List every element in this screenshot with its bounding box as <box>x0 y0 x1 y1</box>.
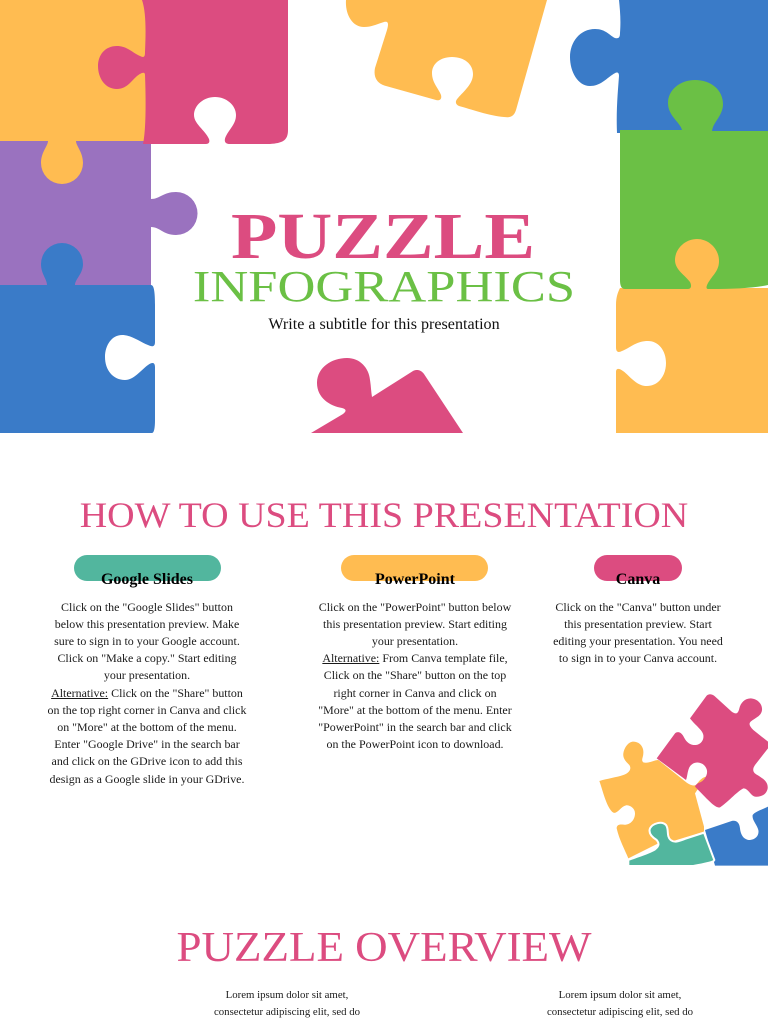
text: overview right: Lorem ipsum dolor sit amet, <box>559 989 681 1001</box>
text: Google Slides instructions <box>48 600 246 786</box>
text: PowerPoint instructions: Click on the "Share" button on the top <box>324 668 506 682</box>
text: PowerPoint instructions: right corner in Canva and click on <box>333 686 497 700</box>
button: PowerPoint <box>341 555 488 581</box>
piece: yellow top centre <box>346 0 547 117</box>
text: PowerPoint instructions <box>318 600 512 751</box>
piece: pink top left <box>98 0 288 144</box>
text: PowerPoint instructions: "More" at the bottom of the menu. Enter <box>318 703 512 717</box>
text: overview left: Lorem ipsum dolor sit amet, <box>226 989 348 1001</box>
text: Google Slides instructions: design as a Google slide in your GDrive. <box>50 772 244 786</box>
piece: cluster pink <box>657 694 768 807</box>
piece: cluster blue <box>705 807 768 866</box>
text: Google Slides instructions: Click on "Make a copy." Start editing <box>57 651 237 665</box>
heading: puzzle overview: PUZZLE OVERVIEW <box>176 923 592 971</box>
piece: green right <box>620 80 768 289</box>
text: Google Slides instructions: and click on the GDrive icon to add this <box>52 754 242 768</box>
label: Google Slides: Google Slides <box>101 571 193 588</box>
heading: how to use: HOW TO USE THIS PRESENTATION <box>80 496 688 536</box>
text: Google Slides instructions: below this presentation preview. Make <box>55 617 239 631</box>
text: PowerPoint instructions: your presentation. <box>372 634 458 648</box>
text: PowerPoint instructions: Alternative: From Canva template file, <box>322 651 508 665</box>
text: Google Slides instructions: sure to sign in to your Google account. <box>54 634 240 648</box>
text: Canva instructions: editing your presentation. You need <box>553 634 723 648</box>
icon: puzzle pieces cluster <box>599 694 768 866</box>
text: Google Slides instructions: Click on the "Google Slides" button <box>61 600 233 614</box>
title: INFOGRAPHICS: INFOGRAPHICS <box>193 263 575 311</box>
tab: yellow into green <box>670 235 724 295</box>
text: overview left <box>214 989 360 1024</box>
piece: blue bottom left <box>0 243 155 433</box>
text: overview right <box>547 989 693 1024</box>
text: Google Slides instructions: on "More" at the bottom of the menu. <box>57 720 237 734</box>
text: Google Slides instructions: Enter "Google Drive" in the search bar <box>54 737 240 751</box>
text: PowerPoint instructions: "PowerPoint" in the search bar and click <box>318 720 512 734</box>
text: PowerPoint instructions: on the PowerPoint icon to download. <box>326 737 504 751</box>
text: Canva instructions <box>553 600 723 665</box>
piece: cluster yellow <box>599 742 706 858</box>
text: Canva instructions: to sign in to your Canva account. <box>559 651 717 665</box>
text: Canva instructions: this presentation preview. Start <box>564 617 712 631</box>
text: Google Slides instructions: on the top right corner in Canva and click <box>48 703 246 717</box>
text: PowerPoint instructions: this presentation preview. Start editing <box>323 617 507 631</box>
text: overview right: consectetur adipiscing elit, sed do <box>547 1006 693 1018</box>
label: Canva: Canva <box>616 571 660 588</box>
text: Google Slides instructions: your presentation. <box>104 668 190 682</box>
piece: yellow right <box>616 288 768 433</box>
piece: cluster teal <box>628 823 714 866</box>
piece: blue top right <box>570 0 768 133</box>
text: PowerPoint instructions: Click on the "PowerPoint" button below <box>319 600 511 614</box>
text: overview left: consectetur adipiscing elit, sed do <box>214 1006 360 1018</box>
subtitle: Write a subtitle for this presentation <box>268 316 500 333</box>
piece: pink bottom centre <box>311 358 463 433</box>
button: Google Slides <box>74 555 221 581</box>
piece: yellow top left <box>0 0 146 184</box>
text: Canva instructions: Click on the "Canva" button under <box>555 600 721 614</box>
title: PUZZLE: PUZZLE <box>231 200 535 272</box>
button: Canva <box>594 555 682 581</box>
text: Google Slides instructions: Alternative: Click on the "Share" button <box>51 686 243 700</box>
label: PowerPoint: PowerPoint <box>375 571 455 588</box>
piece: purple left <box>0 141 198 287</box>
